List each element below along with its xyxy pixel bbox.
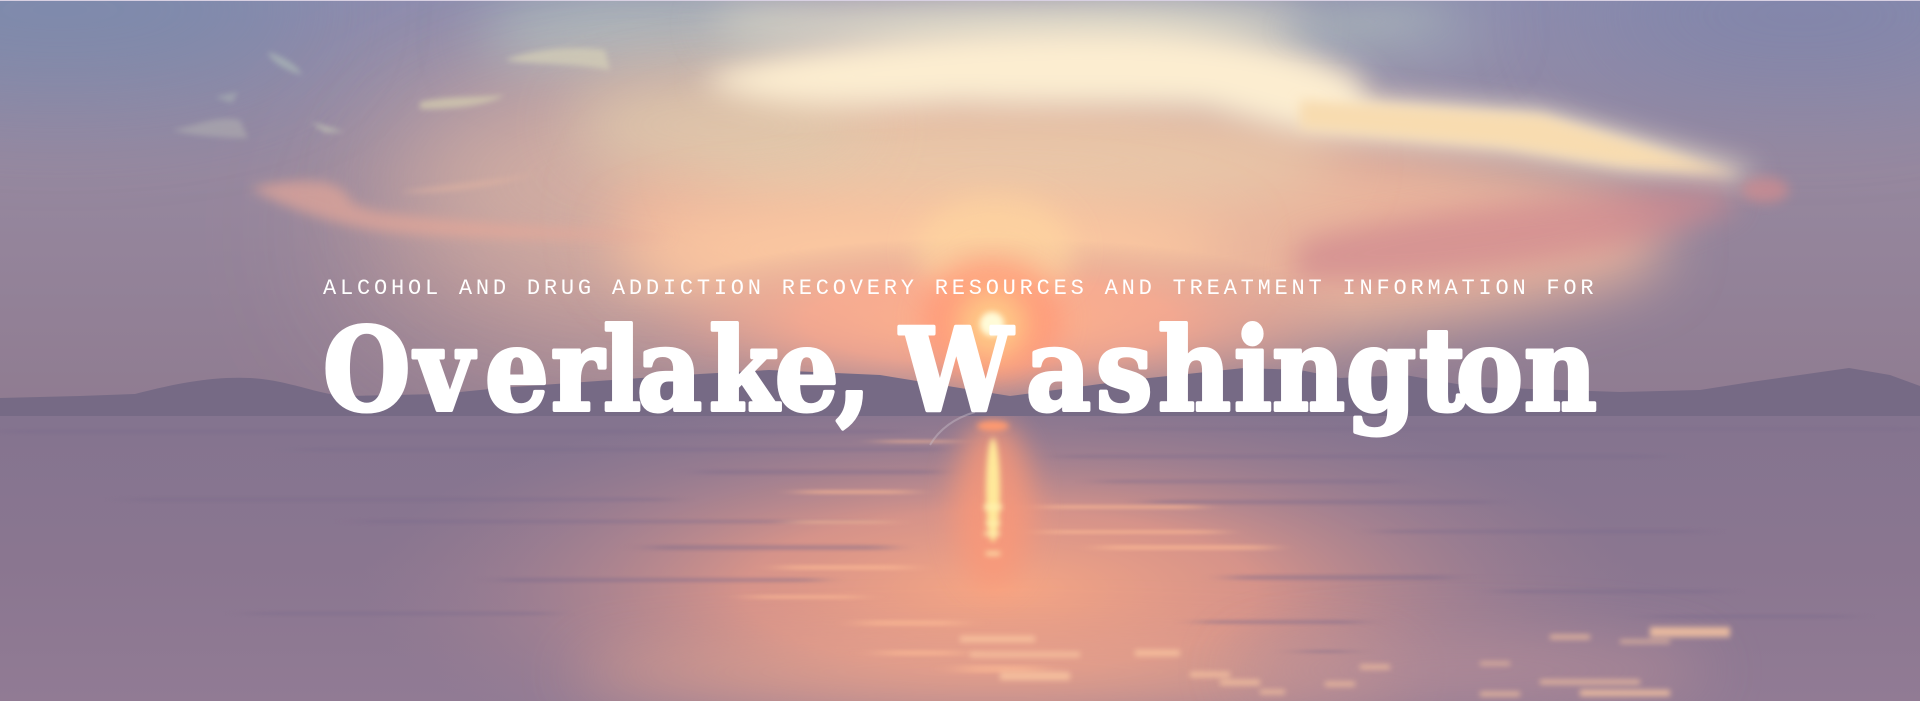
sun — [958, 291, 1026, 359]
broad warm wash — [370, 100, 1330, 360]
pink cloud right — [1290, 189, 1736, 282]
left wisps — [252, 175, 580, 240]
cream cloud — [710, 0, 1310, 53]
sun glow — [701, 249, 1268, 394]
title: Overlake, Washington — [323, 304, 1597, 438]
subtitle: ALCOHOL AND DRUG ADDICTION RECOVERY RESOURCES AND TREATMENT INFORMATION FOR — [323, 276, 1597, 301]
sky corner tints — [0, 0, 320, 80]
lens flare arc — [930, 412, 975, 445]
hills — [0, 368, 1920, 420]
dark ripples — [490, 448, 1529, 654]
teal haze — [480, 0, 820, 80]
top edge — [0, 0, 1920, 1]
sun reflection — [953, 420, 1033, 590]
bright ripples — [750, 440, 1270, 673]
